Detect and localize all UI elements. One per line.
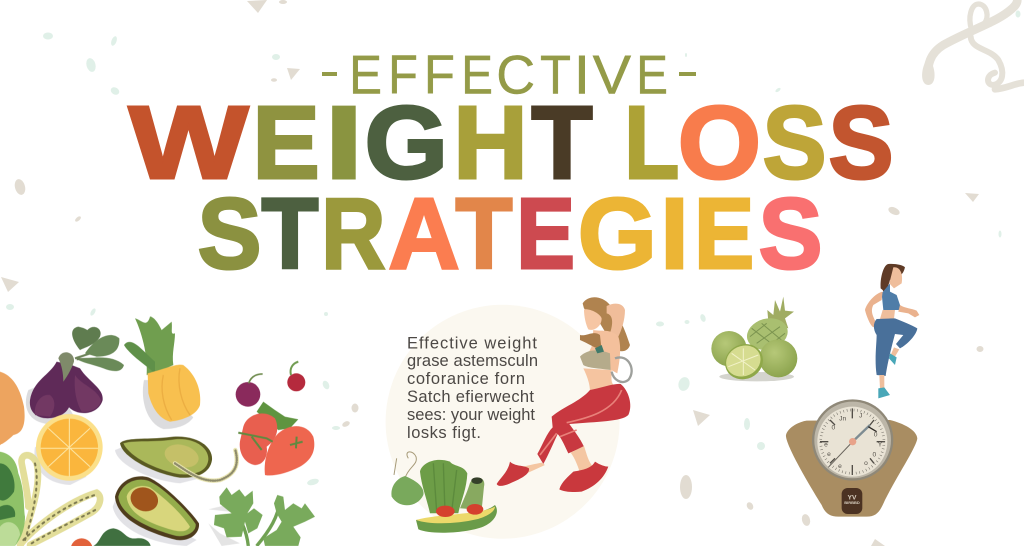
headline line one bbox=[129, 85, 893, 200]
icon: beets bbox=[26, 327, 124, 424]
headline line one: H bbox=[453, 85, 528, 200]
headline line two: R bbox=[321, 178, 385, 290]
kicker: effective: C bbox=[496, 44, 535, 106]
icon: lettuce bbox=[0, 452, 25, 546]
headline line one: S bbox=[763, 85, 826, 200]
icon: weighing scale: Y bbox=[878, 442, 883, 449]
kicker: effective: V bbox=[593, 44, 632, 106]
headline line two bbox=[198, 178, 822, 290]
headline line one: G bbox=[365, 85, 448, 200]
icon: tape measure bbox=[20, 450, 237, 545]
icon: tomato and dark leaves bbox=[71, 528, 151, 546]
icon: weighing scale: Jn bbox=[839, 416, 846, 423]
headline line two: G bbox=[578, 178, 657, 290]
text block: Satch efierwecht bbox=[407, 388, 534, 406]
text block: Effective weight bbox=[407, 334, 537, 352]
icon: orange slice bbox=[34, 414, 103, 485]
headline line one: T bbox=[532, 85, 592, 200]
headline line one: I bbox=[325, 85, 363, 200]
icon: weighing scale: J bbox=[859, 412, 862, 419]
icon: limes and pineapple bbox=[711, 297, 797, 386]
headline line one: W bbox=[129, 85, 249, 200]
panel: fruit and vegetable collage bbox=[0, 317, 315, 546]
text block: losks figt. bbox=[407, 424, 481, 442]
icon: running woman bbox=[865, 264, 919, 398]
icon: strawberries bbox=[238, 402, 314, 475]
text block: coforanice forn bbox=[407, 370, 525, 388]
headline line one: E bbox=[253, 85, 320, 200]
cream circle bbox=[386, 305, 620, 539]
icon: yellow fruit with leaves bbox=[124, 317, 200, 429]
icon: avocado half, top bbox=[115, 436, 212, 483]
title bbox=[129, 44, 893, 290]
icon: weighing scale: 0 bbox=[874, 432, 878, 439]
headline line two: E bbox=[516, 178, 575, 290]
icon: exercising woman bbox=[497, 297, 632, 492]
icon: avocado half, bottom bbox=[113, 476, 199, 546]
headline line one: S bbox=[829, 85, 893, 200]
text block: sees: your weight bbox=[407, 406, 535, 424]
kicker: effective: E bbox=[636, 44, 668, 106]
icon: orange squash bbox=[0, 372, 25, 445]
icon: weighing scale: e bbox=[824, 442, 828, 449]
icon: weighing scale: 0 bbox=[872, 452, 876, 459]
headline line two: T bbox=[262, 178, 318, 290]
text block: grase astemsculn bbox=[407, 352, 538, 370]
icon: weighing scale: YV bbox=[848, 494, 857, 501]
kicker: effective: I bbox=[574, 44, 590, 106]
icon: vegetable bowl bbox=[391, 452, 497, 533]
kicker: effective: F bbox=[424, 44, 455, 106]
icon: weighing scale: e bbox=[827, 451, 831, 458]
icon: weighing scale bbox=[786, 399, 917, 517]
kicker: effective: E bbox=[461, 44, 493, 106]
kicker: effective: E bbox=[349, 44, 382, 106]
icon: cherries bbox=[236, 362, 305, 407]
headline line two: T bbox=[456, 178, 512, 290]
text block bbox=[407, 334, 538, 442]
icon: weighing scale: o bbox=[864, 460, 868, 467]
kicker: effective: F bbox=[388, 44, 418, 106]
icon: herb sprigs bbox=[208, 487, 315, 546]
kicker: effective: T bbox=[540, 44, 571, 106]
icon: weighing scale: BIRBBD bbox=[844, 500, 860, 505]
headline line two: A bbox=[388, 178, 460, 290]
panel: limes, runner and scale bbox=[711, 264, 919, 517]
squiggle ribbon, top right bbox=[922, 0, 1024, 89]
icon: weighing scale: 0 bbox=[831, 424, 835, 431]
headline line two: E bbox=[694, 178, 754, 290]
panel: exercise callout circle bbox=[386, 297, 632, 539]
headline line one: L bbox=[624, 85, 679, 200]
kicker: effective bbox=[322, 44, 696, 106]
icon: weighing scale: e bbox=[838, 463, 842, 470]
headline line one: O bbox=[678, 85, 761, 200]
headline line two: S bbox=[759, 178, 822, 290]
headline line two: S bbox=[198, 178, 261, 290]
headline line two: I bbox=[661, 178, 688, 290]
